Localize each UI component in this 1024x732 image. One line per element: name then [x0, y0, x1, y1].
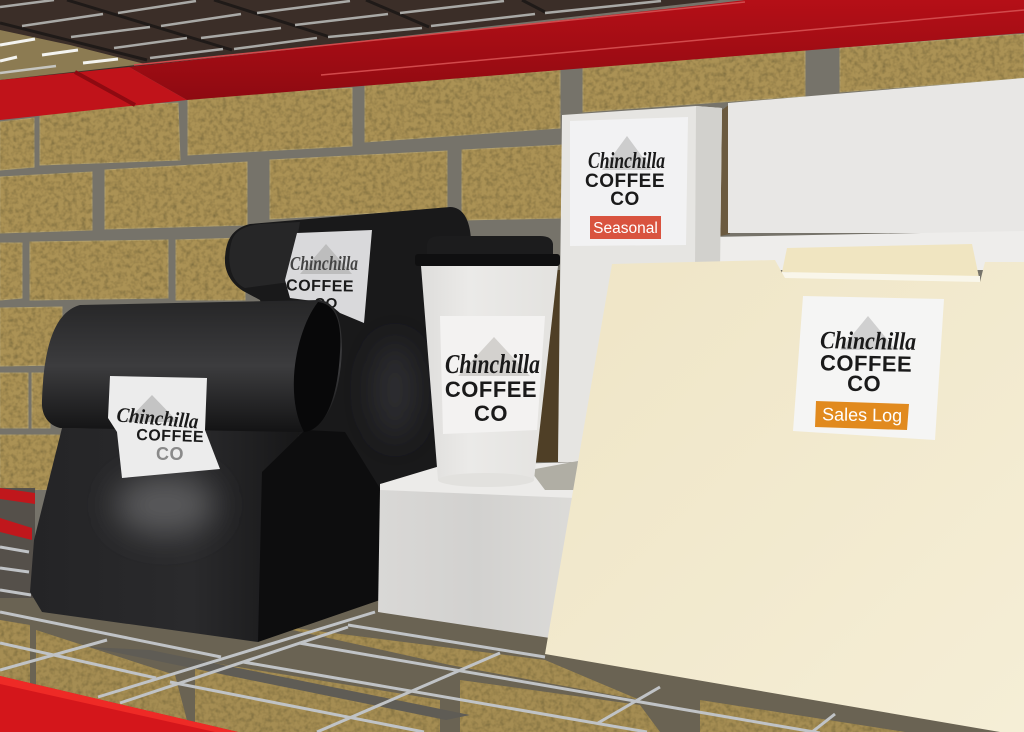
label: sales log: CO — [847, 371, 881, 396]
manila folder — [545, 244, 1024, 732]
label: cup: COFFEE — [445, 377, 537, 402]
label: front bag — [108, 376, 220, 478]
label: back bag — [285, 230, 372, 323]
tall white seasonal box — [558, 106, 722, 462]
top red shelf beam — [0, 0, 1024, 120]
chrome wire shelf — [0, 547, 835, 732]
label: sales log: Chinchilla — [820, 327, 916, 356]
white flat box, top right — [720, 78, 1024, 236]
lower wire shelf background — [0, 488, 1024, 732]
label: front bag: COFFEE — [136, 427, 204, 446]
label: seasonal: Chinchilla — [588, 148, 665, 173]
label: front bag: CO — [156, 444, 184, 464]
label: back bag: CO — [314, 295, 338, 312]
cup lid — [415, 236, 560, 266]
label: cup: CO — [474, 401, 508, 426]
label: cup: Chinchilla — [445, 349, 540, 379]
label: back bag: Chinchilla — [290, 253, 358, 275]
label: sales log: COFFEE — [820, 350, 912, 377]
label: front bag: Chinchilla — [116, 402, 200, 433]
label: sales log — [793, 296, 944, 440]
paper coffee cup — [415, 236, 560, 487]
label: seasonal: CO — [610, 189, 640, 210]
label: seasonal: COFFEE — [585, 171, 665, 192]
front black coffee bag — [30, 300, 381, 642]
bottom red shelf beam — [0, 676, 238, 732]
label: seasonal — [570, 117, 688, 246]
label: back bag: COFFEE — [286, 277, 354, 296]
white flat box, lower right — [708, 231, 1024, 270]
top wire shelf — [0, 0, 720, 82]
label: seasonal: Seasonal — [593, 220, 658, 237]
label: cup — [440, 316, 545, 434]
white box under cup — [378, 461, 580, 638]
back black coffee bag — [225, 207, 471, 500]
label: sales log: Sales Log — [822, 404, 902, 426]
